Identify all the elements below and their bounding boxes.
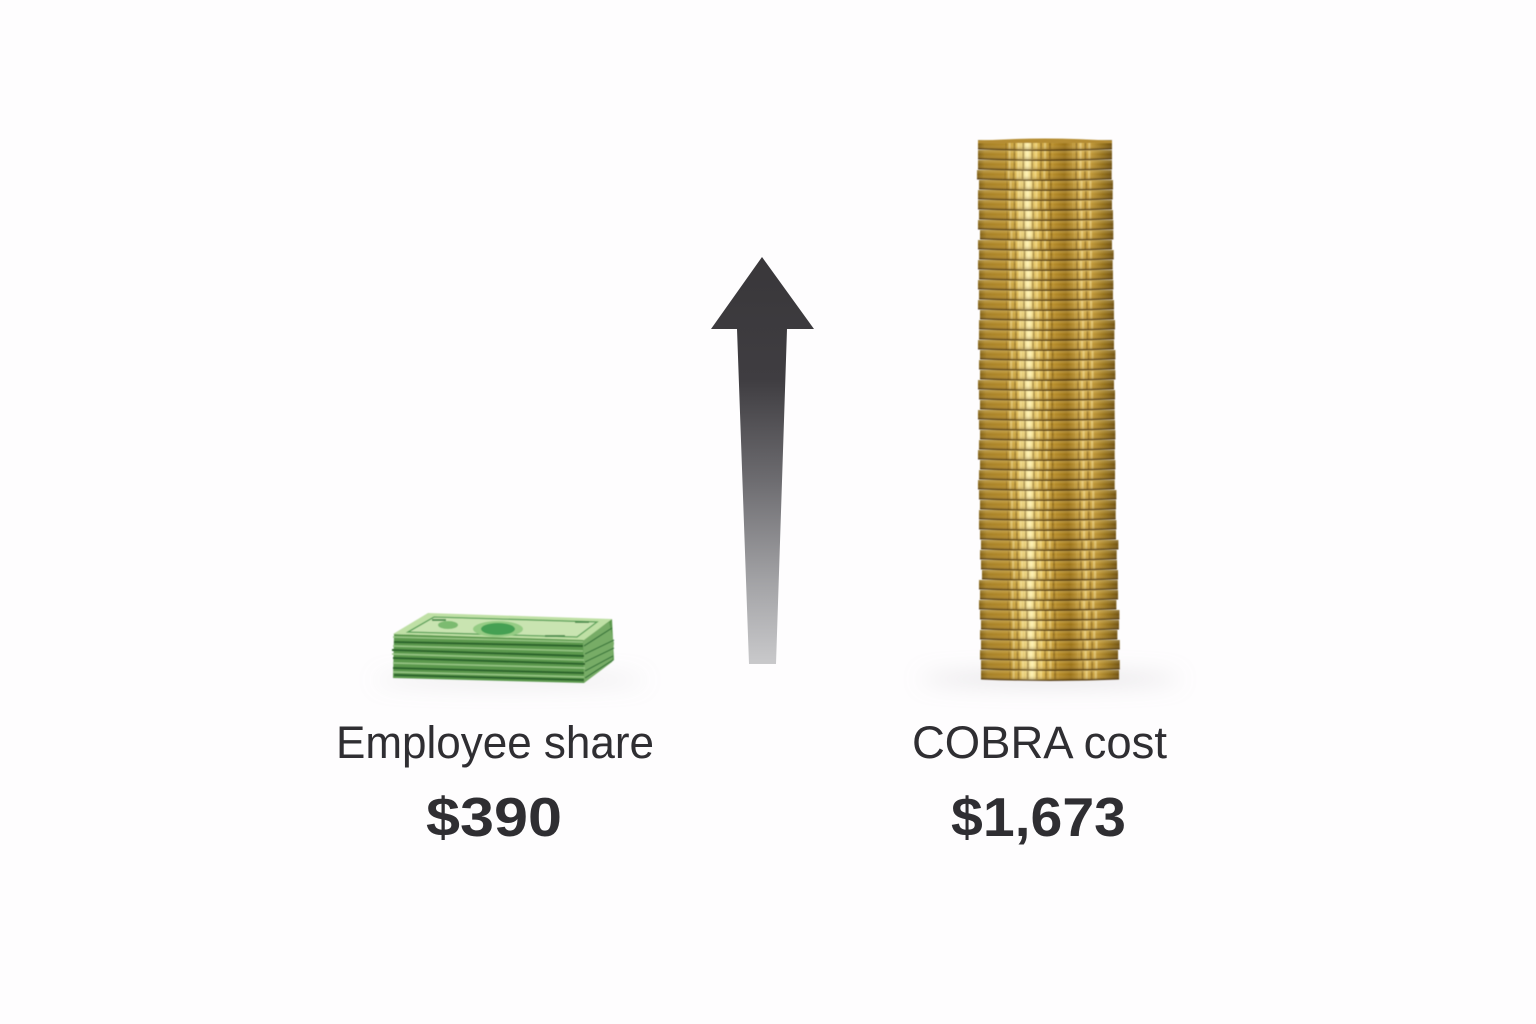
banknote top — [393, 613, 612, 640]
cash side and front — [393, 619, 614, 683]
value: $1,673: $1,673 — [951, 786, 1126, 848]
icon: tall stack of gold coins — [977, 138, 1120, 680]
arrow: pointing up with gradient — [711, 257, 814, 664]
label: Employee share: Employee share — [336, 717, 654, 768]
shadow: under cash — [375, 675, 645, 685]
shadow: under coins — [920, 673, 1180, 685]
icon: stack of green cash — [392, 613, 614, 683]
label: COBRA cost: COBRA cost — [912, 717, 1167, 768]
value: $390: $390 — [426, 786, 562, 848]
